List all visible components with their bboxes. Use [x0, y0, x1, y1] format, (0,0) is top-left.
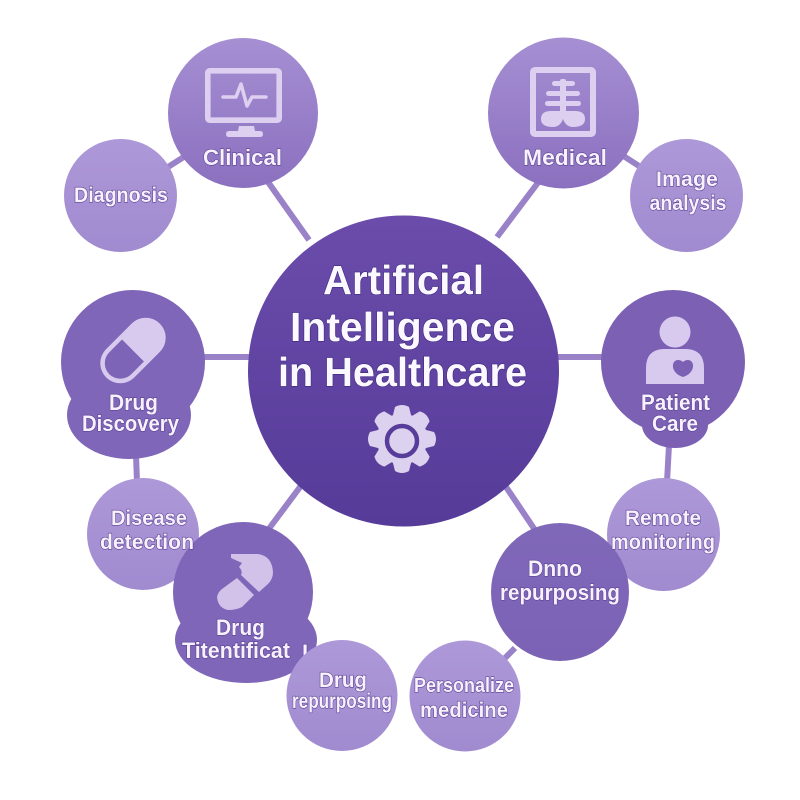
node: Medical: Medical	[523, 145, 607, 170]
satellite: Diagnosis: Diagnosis	[74, 184, 168, 207]
node: Clinical: Clinical	[203, 145, 282, 170]
node: Drug Discovery: Discovery	[82, 411, 180, 436]
node: Drug Titentificat: I	[302, 640, 308, 665]
satellite: Remote monitoring: Remote	[625, 507, 701, 530]
satellite: Personalize medicine	[410, 640, 520, 752]
satellite: Drug repurposing	[286, 640, 398, 751]
icon: broken capsule	[217, 554, 273, 610]
satellite: Image analysis: Image	[656, 168, 718, 191]
satellite: Image analysis	[630, 139, 743, 252]
node: Dnno repurposing: repurposing	[500, 580, 620, 605]
satellite: Personalize medicine: medicine	[420, 699, 508, 722]
icon: monitor with heartbeat	[208, 71, 279, 137]
connector lines	[136, 153, 669, 668]
node: Patient Care	[601, 290, 745, 448]
node: Drug Titentificat: Titentificat	[182, 638, 291, 663]
title: Artificial	[323, 257, 484, 303]
satellite: Diagnosis	[64, 139, 177, 252]
satellite: Drug repurposing: Drug	[319, 669, 367, 692]
icon: x-ray	[533, 70, 593, 134]
satellite: Remote monitoring	[607, 478, 720, 591]
node: Drug Discovery: Drug	[109, 390, 158, 415]
node: Clinical	[168, 38, 318, 188]
satellite: Image analysis: analysis	[650, 192, 726, 215]
node: Patient Care: Patient	[641, 390, 711, 415]
node: Patient Care: Care	[652, 411, 698, 436]
central circle	[248, 216, 559, 526]
satellite: Drug repurposing: repurposing	[292, 690, 392, 713]
label: Disease detection: detection	[100, 531, 194, 554]
title: Intelligence	[290, 304, 515, 350]
satellite: Disease detection circle	[87, 478, 199, 590]
icon: capsule	[92, 309, 174, 392]
satellite: Personalize medicine: Personalize	[414, 675, 514, 697]
node: Dnno repurposing: Dnno	[528, 556, 582, 581]
label: monitoring: monitoring	[611, 531, 715, 554]
icon: gear	[368, 405, 436, 473]
label: Disease detection: Disease	[111, 507, 187, 530]
icon: person with heart	[646, 316, 704, 384]
node: Dnno repurposing	[491, 523, 629, 661]
node: Drug Titentificat: Drug	[216, 615, 265, 640]
label: Disease detection	[100, 507, 194, 554]
node: Medical	[488, 38, 639, 188]
node: Drug Titentificat	[173, 522, 317, 683]
title: in Healthcare	[278, 349, 527, 395]
title	[278, 257, 527, 395]
node: Drug Discovery	[61, 290, 205, 459]
